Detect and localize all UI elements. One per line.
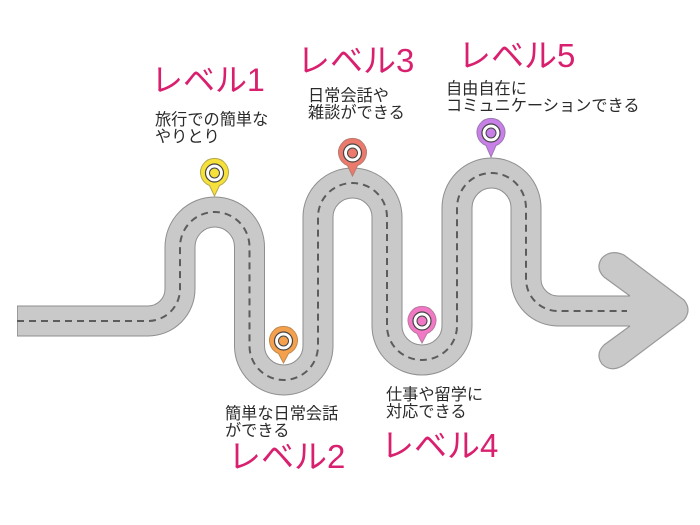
arrow head [599,253,688,369]
centre dashed line [17,173,627,380]
icon: pink pin [408,306,436,343]
text: level 5 description: コミュニケーションできる [446,97,640,115]
icon: orange pin [270,326,298,363]
road surface [18,173,632,380]
icon: red pin [338,138,366,176]
text: level 3 description [308,87,405,122]
text: level 1 description: やりとり [155,128,220,146]
road outline [17,173,630,380]
heading: level 1: レベル1 [151,62,265,98]
text: level 2 description: 簡単な日常会話 [225,405,338,423]
text: level 1 description: 旅行での簡単な [155,111,268,129]
text: level 1 description [155,110,268,146]
heading: level 4: レベル4 [381,427,498,464]
heading: level 2: レベル2 [228,438,345,475]
text: level 2 description: ができる [225,422,289,440]
heading: level 3: レベル3 [297,42,414,79]
icon: yellow pin [200,158,228,196]
text: level 4 description: 対応できる [386,403,467,421]
heading: level 5: レベル5 [458,37,575,74]
text: level 2 description [225,404,338,440]
text: level 3 description: 雑談ができる [308,104,405,122]
text: level 5 description: 自由自在に [446,80,527,98]
text: level 4 description: 仕事や留学に [386,386,483,404]
text: level 5 description [446,80,640,115]
icon: purple pin [477,118,505,157]
text: level 3 description: 日常会話や [308,87,389,105]
text: level 4 description [386,386,483,421]
